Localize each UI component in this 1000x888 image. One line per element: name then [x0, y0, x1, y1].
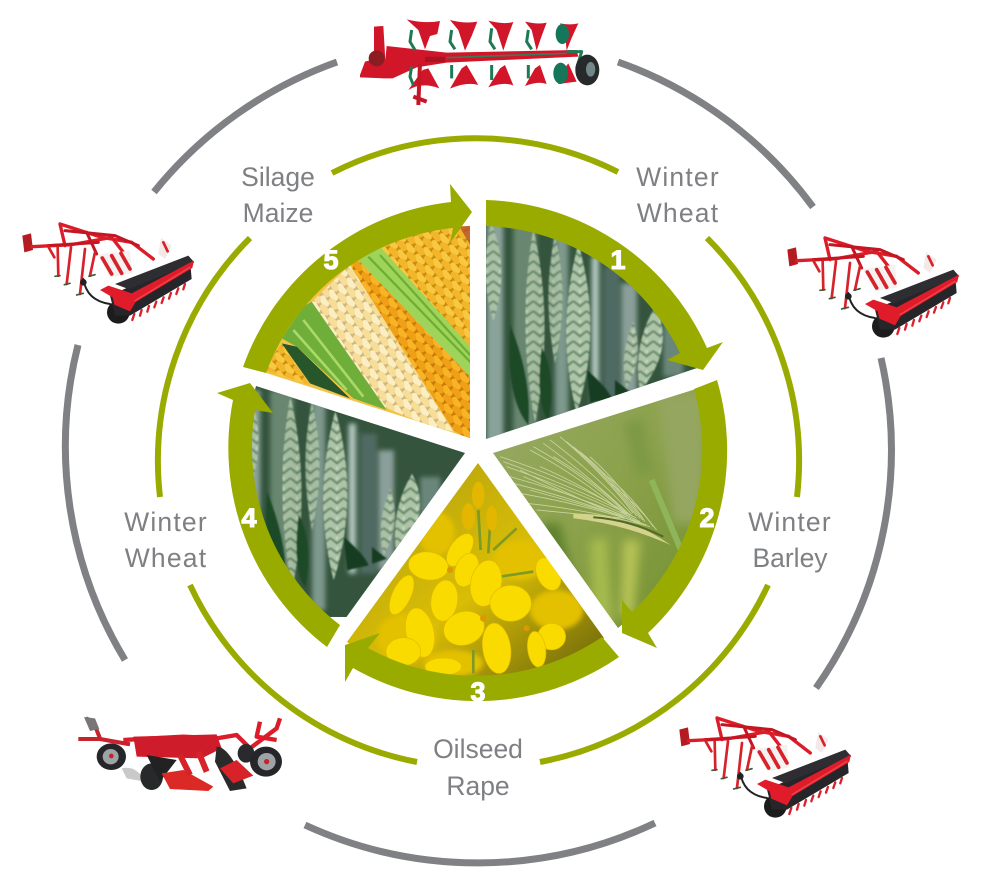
arrow 5: [243, 184, 472, 373]
machine: cultivator (bottom right): [679, 718, 851, 818]
label: winter barley: Barley: [752, 543, 828, 573]
label: silage maize: Maize: [243, 198, 313, 228]
arrow 4: [217, 383, 340, 647]
arrow 3: [345, 633, 619, 701]
label: winter wheat top: Wheat: [637, 198, 719, 228]
outer grey ring: tillage cycle: [65, 62, 891, 863]
photo wedge 1: winter wheat: [486, 226, 697, 439]
step number 5: 5: [323, 245, 339, 275]
arrow 2: [622, 380, 727, 648]
step number 2: 2: [699, 503, 715, 533]
photo wedge 4: winter wheat: [224, 377, 477, 617]
label: winter wheat left: Wheat: [125, 543, 207, 573]
label: silage maize: Silage: [241, 162, 315, 192]
photo wedge 5: silage maize: [266, 226, 470, 438]
machine: reversible plough (top): [360, 19, 599, 105]
step number 4: 4: [241, 503, 257, 533]
arrow 1: [486, 200, 723, 370]
label: oilseed rape: Rape: [446, 771, 510, 801]
machine: cultivator (left): [22, 224, 194, 324]
step number 1: 1: [610, 245, 626, 275]
photo wedge 3: oilseed rape: [347, 463, 604, 676]
middle green ring: crop sequence: [158, 138, 799, 762]
label: winter wheat left: Winter: [124, 507, 208, 537]
machine: disc harrow (bottom left): [78, 717, 282, 791]
label: oilseed rape: Oilseed: [433, 734, 523, 764]
step number 3: 3: [470, 677, 486, 707]
label: winter wheat top: Winter: [636, 162, 720, 192]
photo wedge 2: winter barley: [493, 390, 702, 628]
label: winter barley: Winter: [748, 507, 832, 537]
machine: cultivator (right): [787, 238, 959, 338]
